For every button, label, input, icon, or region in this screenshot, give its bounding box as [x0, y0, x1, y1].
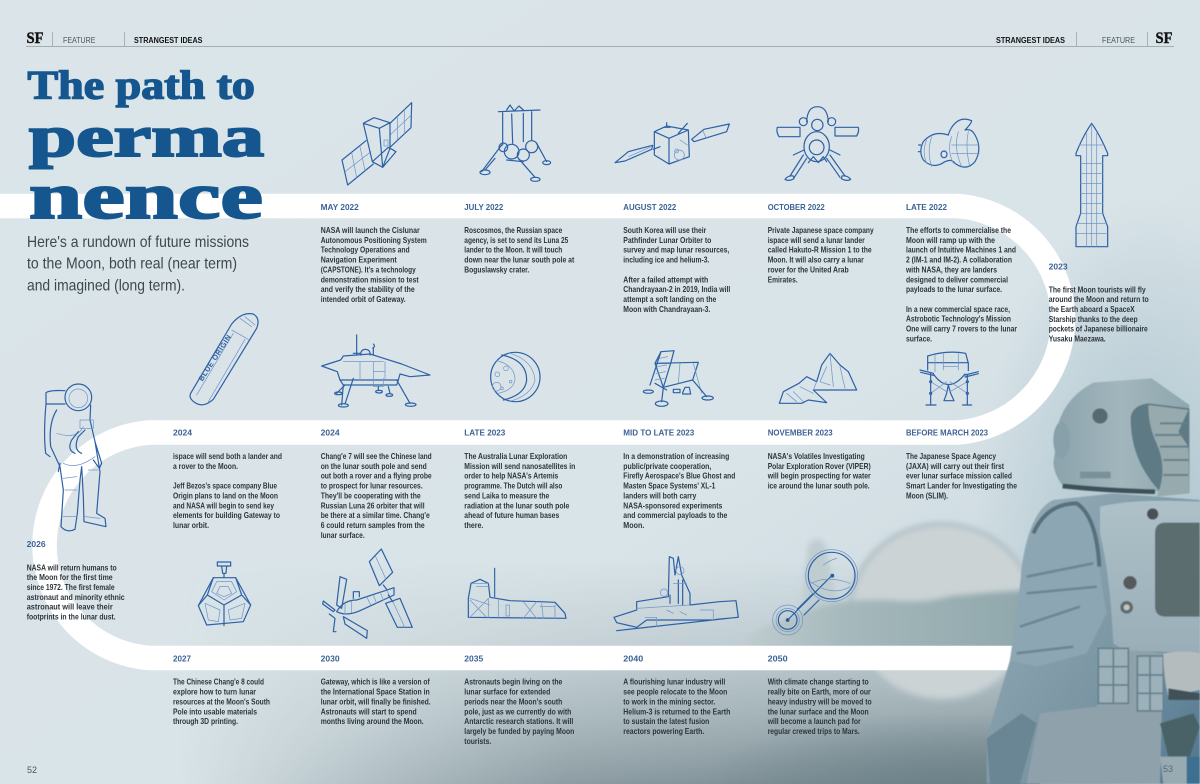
- panel: 2024 ispace and Blue Origin: ispace will send both a lander and: [173, 451, 282, 461]
- panel: Mid to late 2023: and commercial payloads to the: [623, 510, 728, 520]
- intro text: Here's a rundown of future missions: [27, 234, 249, 251]
- panel: 2030: 2030: [321, 654, 340, 664]
- panel: Late 2022: The efforts to commercialise the: [906, 225, 1011, 235]
- panel: 2040: to work in the mining sector.: [623, 696, 715, 706]
- icon: Gateway station: [323, 549, 412, 638]
- panel: 2035: [464, 568, 574, 746]
- panel: Mid to late 2023: NASA-sponsored experiments: [623, 500, 723, 510]
- panel: May 2022: Technology Operations and: [321, 245, 410, 255]
- panel: 2024 Chang'e 7: They'll be cooperating with the: [321, 490, 421, 500]
- panel: October 2022: rover for the United Arab: [768, 264, 849, 274]
- panel: 2024 ispace and Blue Origin: 2024: [173, 428, 192, 438]
- icon: Luna 25 lander: [480, 105, 551, 181]
- panel: 2040: [614, 557, 738, 736]
- sub: chest pouches: [1098, 648, 1163, 711]
- panel: 2026: 2026: [27, 540, 46, 549]
- header: left page: [26, 30, 203, 47]
- panel: October 2022: ispace will send a lunar lander: [768, 235, 865, 245]
- panel: Mid to late 2023: public/private cooperation,: [623, 461, 711, 471]
- panel: Late 2022: designed to deliver commercial: [906, 274, 1008, 284]
- panel: 2024 Chang'e 7: [321, 335, 432, 540]
- panel: 2040: 2040: [623, 654, 644, 664]
- panel: 2023: The first Moon tourists will fly: [1049, 284, 1146, 294]
- panel: Before March 2023: BEFORE MARCH 2023: [906, 428, 988, 438]
- panel: 2023: the Earth aboard a SpaceX: [1049, 304, 1135, 314]
- panel: 2027: The Chinese Chang'e 8 could: [173, 677, 264, 687]
- panel: Late 2022: launch of Intuitive Machines 1 and: [906, 245, 1016, 255]
- panel: May 2022: [321, 103, 427, 304]
- panel: 2050: [767, 550, 872, 736]
- panel: 2050: really bite on Earth, more of our: [768, 687, 871, 697]
- panel: Late 2022: One will carry 7 rovers to the lunar: [906, 324, 1018, 334]
- panel: 2024 Chang'e 7: out both a rover and a flying probe: [321, 471, 432, 481]
- panel: 2023: [1049, 123, 1149, 344]
- icon: dodecahedron habitat: [198, 562, 251, 626]
- panel: Late 2022: with NASA, they are landers: [905, 264, 997, 274]
- panel: 2035: periods near the Moon's south: [464, 696, 562, 706]
- panel: Before March 2023: [906, 352, 1017, 500]
- panel: 2024 ispace and Blue Origin: lunar orbit.: [173, 520, 209, 530]
- panel: 2024 ispace and Blue Origin: elements for building Gateway to: [173, 510, 280, 520]
- panel: July 2022: Boguslawsky crater.: [464, 264, 529, 274]
- panel: Before March 2023: Smart Lander for Investigating the: [906, 481, 1017, 491]
- icon: linked domes launch pad: [773, 550, 858, 635]
- icon: Starship: [1076, 123, 1108, 247]
- panel: 2030: lunar orbit, will finally be finished.: [321, 696, 431, 706]
- panel: August 2022: Moon with Chandrayaan-3.: [623, 304, 710, 314]
- intro text: to the Moon, both real (near term): [27, 256, 237, 272]
- title: The path to: [28, 64, 255, 108]
- panel: 2050: the lunar surface and the Moon: [768, 706, 869, 716]
- panel: Late 2022: In a new commercial space race,: [906, 304, 1010, 314]
- panel: 2027: [173, 562, 270, 726]
- panel: 2024 Chang'e 7: Chang'e 7 will see the Chinese land: [321, 451, 432, 461]
- panel: July 2022: lander to the Moon. It will touch: [464, 245, 562, 255]
- panel: 2024 Chang'e 7: lunar surface.: [321, 530, 365, 540]
- panel: Mid to late 2023: In a demonstration of increasing: [623, 451, 729, 461]
- panel: 2024 ispace and Blue Origin: [173, 314, 282, 530]
- icon: CAPSTONE satellite: [342, 103, 412, 185]
- icon: Hakuto-R lander: [777, 107, 859, 180]
- icon: SLIM lander: [920, 352, 978, 405]
- icon: Blue Origin lander: BLUE ORIGIN: [196, 333, 233, 383]
- panel: 2035: lunar surface for extended: [464, 687, 550, 697]
- header: left page: FEATURE: [63, 36, 96, 45]
- panel: July 2022: JULY 2022: [464, 203, 504, 212]
- panel: Late 2023: Mission will send nanosatellites in: [464, 461, 575, 471]
- panel: Late 2022: surface.: [906, 333, 932, 343]
- panel: August 2022: including ice and helium-3.: [623, 255, 709, 265]
- panel: May 2022: and verify the stability of the: [321, 284, 415, 294]
- panel: Mid to late 2023: Firefly Aerospace's Blue Ghost and: [623, 471, 735, 481]
- panel: October 2022: Moon. It will also carry a lunar: [768, 255, 864, 265]
- panel: May 2022: Autonomous Positioning System: [321, 235, 427, 245]
- panel: May 2022: MAY 2022: [321, 203, 359, 212]
- photo of astronaut: [987, 378, 1200, 784]
- panel: 2040: A flourishing lunar industry will: [623, 677, 725, 687]
- panel: November 2023: [767, 353, 871, 491]
- title: perma: [29, 104, 264, 169]
- panel: 2026: astronaut will leave their: [27, 602, 113, 612]
- panel: October 2022: Emirates.: [768, 274, 798, 284]
- panel: Mid to late 2023: [623, 351, 735, 530]
- panel: 2030: Gateway, which is like a version of: [321, 677, 430, 687]
- panel: 2027: Pole into usable materials: [173, 706, 257, 716]
- panel: 2023: around the Moon and return to: [1049, 294, 1149, 304]
- panel: Late 2022: [905, 119, 1018, 343]
- panel: Late 2023: The Australia Lunar Exploration: [464, 451, 567, 461]
- panel: August 2022: After a failed attempt with: [623, 274, 708, 284]
- panel: 2050: will become a launch pad for: [767, 716, 861, 726]
- panel: July 2022: down near the lunar south pole at: [464, 255, 574, 265]
- panel: July 2022: agency, is set to send its Luna 25: [464, 235, 569, 245]
- header: left page: SF: [26, 30, 44, 47]
- sub: helmet: [1053, 378, 1189, 493]
- panel: July 2022: Roscosmos, the Russian space: [464, 225, 563, 235]
- panel: May 2022: Navigation Experiment: [321, 255, 397, 265]
- header: right page: [996, 30, 1172, 47]
- panel: August 2022: Chandrayaan-2 in 2019, India will: [623, 284, 730, 294]
- icon: Moon: [491, 352, 540, 402]
- panel: 2024 ispace and Blue Origin: Origin plans to land on the Moon: [173, 490, 278, 500]
- panel: 2024 ispace and Blue Origin: a rover to the Moon.: [173, 461, 238, 471]
- panel: Late 2023: send Laika to measure the: [464, 490, 550, 500]
- panel: 2040: see people relocate to the Moon: [623, 687, 727, 697]
- panel: 2024 Chang'e 7: to prospect for lunar resources.: [321, 481, 423, 491]
- panel: 2030: [321, 549, 431, 726]
- panel: 2026: NASA will return humans to: [27, 562, 117, 572]
- panel: May 2022: NASA will launch the Cislunar: [321, 225, 420, 235]
- panel: Before March 2023: ever lunar surface mission called: [906, 471, 1012, 481]
- icon: Blue Ghost lander: [643, 351, 713, 406]
- panel: Mid to late 2023: Moon.: [623, 520, 644, 530]
- panel: August 2022: survey and map lunar resources,: [623, 245, 729, 255]
- panel: 2030: Astronauts will start to spend: [321, 706, 417, 716]
- panel: 2027: 2027: [173, 654, 191, 664]
- panel: August 2022: attempt a soft landing on the: [623, 294, 717, 304]
- page number: 53: 53: [1163, 764, 1173, 774]
- panel: 2023: Starship thanks to the deep: [1049, 314, 1138, 324]
- panel: 2026: since 1972. The first female: [27, 582, 115, 592]
- panel: Before March 2023: (JAXA) will carry out their first: [906, 461, 1004, 471]
- panel: Mid to late 2023: landers will both carry: [623, 490, 697, 500]
- icon: lunar base: [468, 568, 566, 618]
- title: [28, 64, 264, 232]
- panel: 2050: regular crewed trips to Mars.: [768, 726, 860, 736]
- panel: Before March 2023: Moon (SLIM).: [906, 490, 948, 500]
- panel: November 2023: NASA's Volatiles Investigating: [768, 451, 865, 461]
- header rule: [26, 46, 1174, 47]
- panel: 2050: heavy industry will be moved to: [768, 696, 872, 706]
- panel: October 2022: called Hakuto-R Mission 1 to the: [768, 245, 872, 255]
- panel: Late 2023: programme. The Dutch will also: [464, 481, 562, 491]
- panel: 2026: the Moon for the first time: [27, 572, 113, 582]
- panel: 2030: the International Space Station in: [321, 687, 430, 697]
- panel: Late 2022: Moon will ramp up with the: [906, 235, 995, 245]
- panel: 2035: largely be funded by paying Moon: [464, 726, 574, 736]
- header: right page: SF: [1156, 30, 1172, 47]
- panel: 2026: footprints in the lunar dust.: [27, 612, 116, 622]
- panel: Late 2022: LATE 2022: [906, 203, 947, 212]
- panel: Mid to late 2023: MID TO LATE 2023: [623, 428, 695, 438]
- panel: 2035: Astronauts begin living on the: [464, 677, 563, 687]
- panel: 2050: 2050: [768, 654, 788, 664]
- panel: August 2022: Pathfinder Lunar Orbiter to: [623, 235, 711, 245]
- panel: 2035: Antarctic research stations. It will: [464, 716, 573, 726]
- panel: May 2022: demonstration mission to test: [321, 274, 419, 284]
- panel: 2023: pockets of Japanese billionaire: [1049, 324, 1148, 334]
- panel: Before March 2023: The Japanese Space Agency: [906, 451, 996, 461]
- panel: October 2022: Private Japanese space company: [768, 225, 874, 235]
- panel: 2040: to sustain the latest fusion: [623, 716, 709, 726]
- panel: 2023: 2023: [1049, 262, 1068, 272]
- panel: 2040: Helium-3 is returned to the Earth: [623, 706, 730, 716]
- background: [205, 221, 1200, 784]
- panel: Late 2023: ahead of future human bases: [464, 510, 560, 520]
- panel: November 2023: ice around the lunar south pole.: [768, 481, 870, 491]
- panel: 2027: through 3D printing.: [173, 716, 238, 726]
- icon: Pathfinder orbiter: [615, 123, 729, 164]
- panel: July 2022: [464, 105, 574, 274]
- icon: astronaut: [45, 384, 106, 531]
- panel: Late 2023: radiation at the lunar south pole: [464, 500, 570, 510]
- header: right page: FEATURE: [1102, 36, 1135, 45]
- panel: 2024 Chang'e 7: Russian Luna 26 orbiter that will: [321, 500, 425, 510]
- panel: October 2022: [768, 107, 874, 284]
- panel: 2024 Chang'e 7: on the lunar south pole and send: [321, 461, 427, 471]
- panel: 2030: months living around the Moon.: [321, 716, 424, 726]
- dome and hills: [737, 524, 1040, 700]
- panel: August 2022: AUGUST 2022: [623, 203, 677, 212]
- panel: October 2022: OCTOBER 2022: [768, 203, 825, 212]
- panel: August 2022: South Korea will use their: [623, 225, 707, 235]
- panel: November 2023: NOVEMBER 2023: [768, 428, 833, 438]
- header: right page: STRANGEST IDEAS: [996, 36, 1066, 45]
- panel: 2024 ispace and Blue Origin: Jeff Bezos's space company Blue: [173, 481, 277, 491]
- panel: 2024 ispace and Blue Origin: and NASA will begin to send key: [173, 500, 274, 510]
- icon: Peregrine lander: [918, 119, 979, 167]
- panel: 2023: Yusaku Maezawa.: [1049, 334, 1106, 344]
- icon: Blue Origin lander: [190, 314, 258, 405]
- icon: Chang'e 7 lander: [322, 335, 430, 407]
- panel: 2040: reactors powering Earth.: [623, 726, 704, 736]
- intro text: and imagined (long term).: [27, 278, 185, 294]
- panel: 2035: 2035: [464, 654, 484, 664]
- panel: May 2022: intended orbit of Gateway.: [321, 294, 406, 304]
- header: left page: STRANGEST IDEAS: [134, 36, 203, 45]
- panel: Mid to late 2023: Masten Space Systems' XL-1: [623, 481, 716, 491]
- panel: Late 2023: order to help NASA's Artemis: [464, 471, 559, 481]
- panel: 2027: explore how to turn lunar: [173, 687, 257, 697]
- panel: Late 2023: there.: [464, 520, 483, 530]
- panel: May 2022: (CAPSTONE). It's a technology: [321, 264, 416, 274]
- panel: Late 2023: [464, 352, 575, 530]
- page number: 52: 52: [27, 765, 37, 775]
- panel: 2035: tourists.: [464, 736, 491, 746]
- panel: 2024 Chang'e 7: 6 could return samples from the: [321, 520, 425, 530]
- sub: backpack: [1100, 501, 1200, 653]
- intro text: [27, 234, 249, 294]
- icon: lunar mining industry: [614, 557, 738, 631]
- panel: Late 2022: Astrobotic Technology's Mission: [906, 314, 1011, 324]
- panel: Late 2022: payloads to the lunar surface.: [906, 284, 1002, 294]
- panel: Late 2022: 2 (IM-1 and IM-2). A collaboration: [906, 255, 1012, 265]
- panel: 2024 Chang'e 7: 2024: [321, 428, 340, 438]
- panel: Late 2023: LATE 2023: [464, 428, 506, 438]
- panel: August 2022: [615, 123, 730, 314]
- title: nence: [29, 159, 263, 232]
- panel: November 2023: Polar Exploration Rover (VIPER): [768, 461, 871, 471]
- panel: November 2023: will begin prospecting for water: [767, 471, 871, 481]
- panel: 2035: pole, just as we currently do with: [464, 706, 571, 716]
- panel: 2024 Chang'e 7: be there at a similar time. Chang'e: [321, 510, 430, 520]
- icon: polar ice mountain: [779, 353, 857, 403]
- panel: 2027: resources at the Moon's South: [173, 696, 270, 706]
- panel: 2026: astronaut and minority ethnic: [27, 592, 125, 602]
- panel: 2026: [27, 384, 125, 622]
- winding white timeline path: [0, 206, 1063, 658]
- panel: 2050: With climate change starting to: [768, 677, 869, 687]
